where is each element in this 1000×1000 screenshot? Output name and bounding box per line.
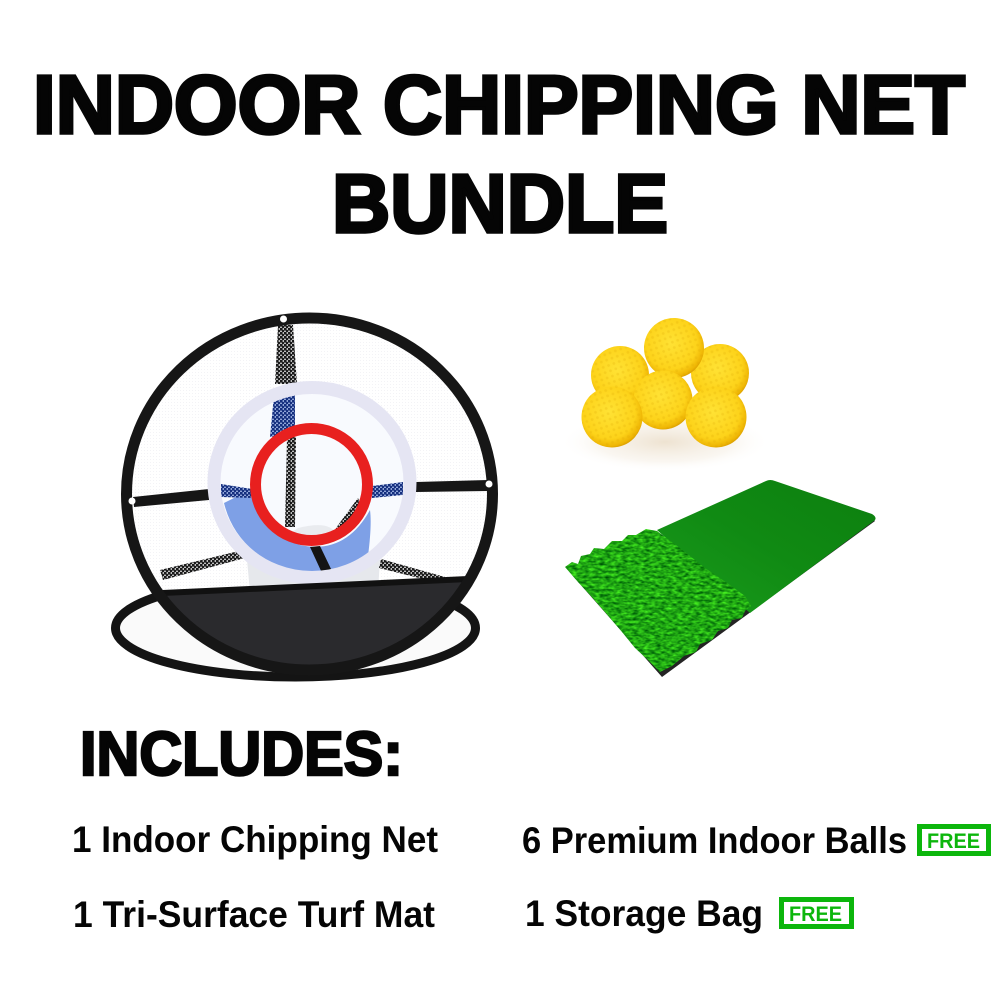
item: chipping net: 1 Indoor Chipping Net [72,819,438,860]
pale target centre [292,525,336,541]
item: indoor balls: 6 Premium Indoor Balls [522,820,907,861]
ball back left [591,346,649,404]
item: storage bag: 1 Storage Bag [525,893,763,934]
title [33,58,965,250]
red target ring [256,428,368,540]
turf mat [565,480,876,677]
grommet right [486,480,492,488]
top strap [275,325,297,384]
white inner ring [214,388,410,578]
free badge: bag: FREE [789,902,842,926]
rear mesh bag [247,560,380,592]
short grass surface [657,480,876,613]
blue strap top [270,395,295,437]
ball middle [634,370,692,430]
lower left mesh strap [160,550,245,580]
net mesh disc [126,318,492,670]
ball back centre [644,318,704,378]
item: turf mat: 1 Tri-Surface Turf Mat [73,894,435,935]
blue netting [224,490,371,574]
side strap right [416,480,488,492]
free badge: balls: FREE [927,829,980,853]
title: INDOOR CHIPPING NET [33,58,965,151]
title: BUNDLE [332,157,668,250]
base hoop [116,579,476,677]
ball front left [582,386,642,448]
ball back right [691,344,749,402]
centre mesh strap [285,437,296,527]
black front tab [310,546,332,573]
blue strap right [372,482,403,498]
chipping net product image [116,316,492,690]
yellow practice balls [560,318,770,472]
ball shadow [560,412,770,472]
grommet left [128,498,136,504]
ball front right [686,386,746,448]
blue strap left [221,484,252,498]
grommet top [280,316,287,322]
black pocket [162,576,465,664]
mat base [572,516,875,677]
side strap left [133,489,209,507]
inner funnel interior [214,387,410,577]
diagonal mesh strap [333,498,362,537]
includes heading: INCLUDES: [80,720,403,789]
long grass surface [565,529,751,672]
outer hoop [126,318,492,670]
lower right mesh strap [379,559,445,584]
